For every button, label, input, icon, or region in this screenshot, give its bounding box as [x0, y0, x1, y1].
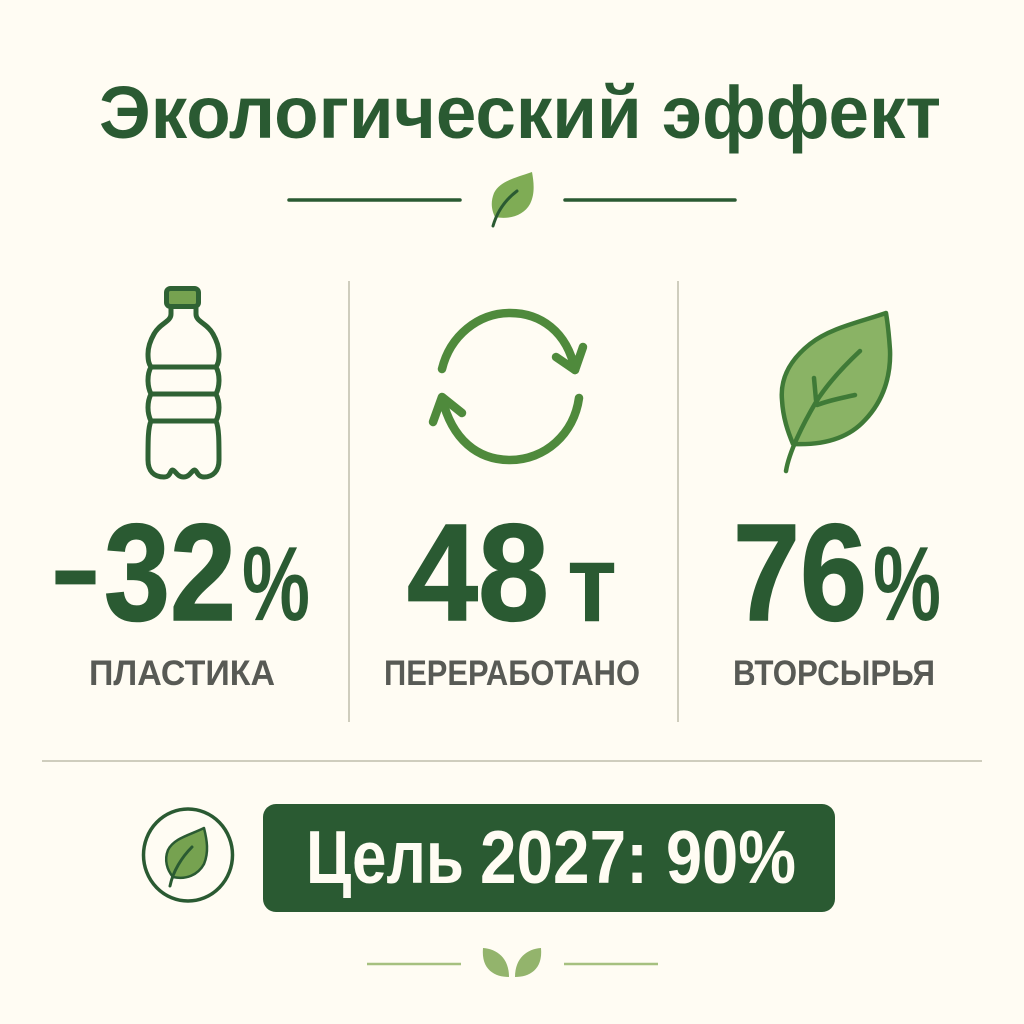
goal badge: 90% — [666, 815, 796, 899]
goal badge — [263, 804, 835, 912]
goal badge: Цель — [306, 815, 464, 899]
horizontal divider — [42, 760, 982, 762]
label: вторсырья: ВТОРСЫРЬЯ — [733, 654, 935, 693]
icon: recycle arrows — [433, 313, 583, 460]
icon: bottle — [148, 288, 219, 477]
metric: -32%: % — [242, 525, 310, 643]
metric: 76%: % — [873, 525, 941, 643]
label: переработано: ПЕРЕРАБОТАНО — [384, 654, 640, 693]
icon: leaf in circle — [144, 809, 232, 901]
icon: large leaf — [782, 313, 890, 471]
column dividers — [349, 281, 678, 722]
title: Экологический эффект — [99, 71, 941, 154]
metric: -32%: 32 — [104, 496, 236, 650]
title divider with leaf — [289, 172, 735, 226]
metric: -32% — [53, 488, 310, 650]
goal badge: 2027: — [480, 815, 648, 899]
metric: 76%: 76 — [733, 496, 867, 650]
label: пластика: ПЛАСТИКА — [89, 654, 275, 693]
metric: 48 t: 48 — [407, 496, 549, 650]
footer ornament — [367, 948, 658, 977]
metric: 48 t: т — [567, 522, 617, 645]
metric: -32%: – — [53, 488, 98, 645]
